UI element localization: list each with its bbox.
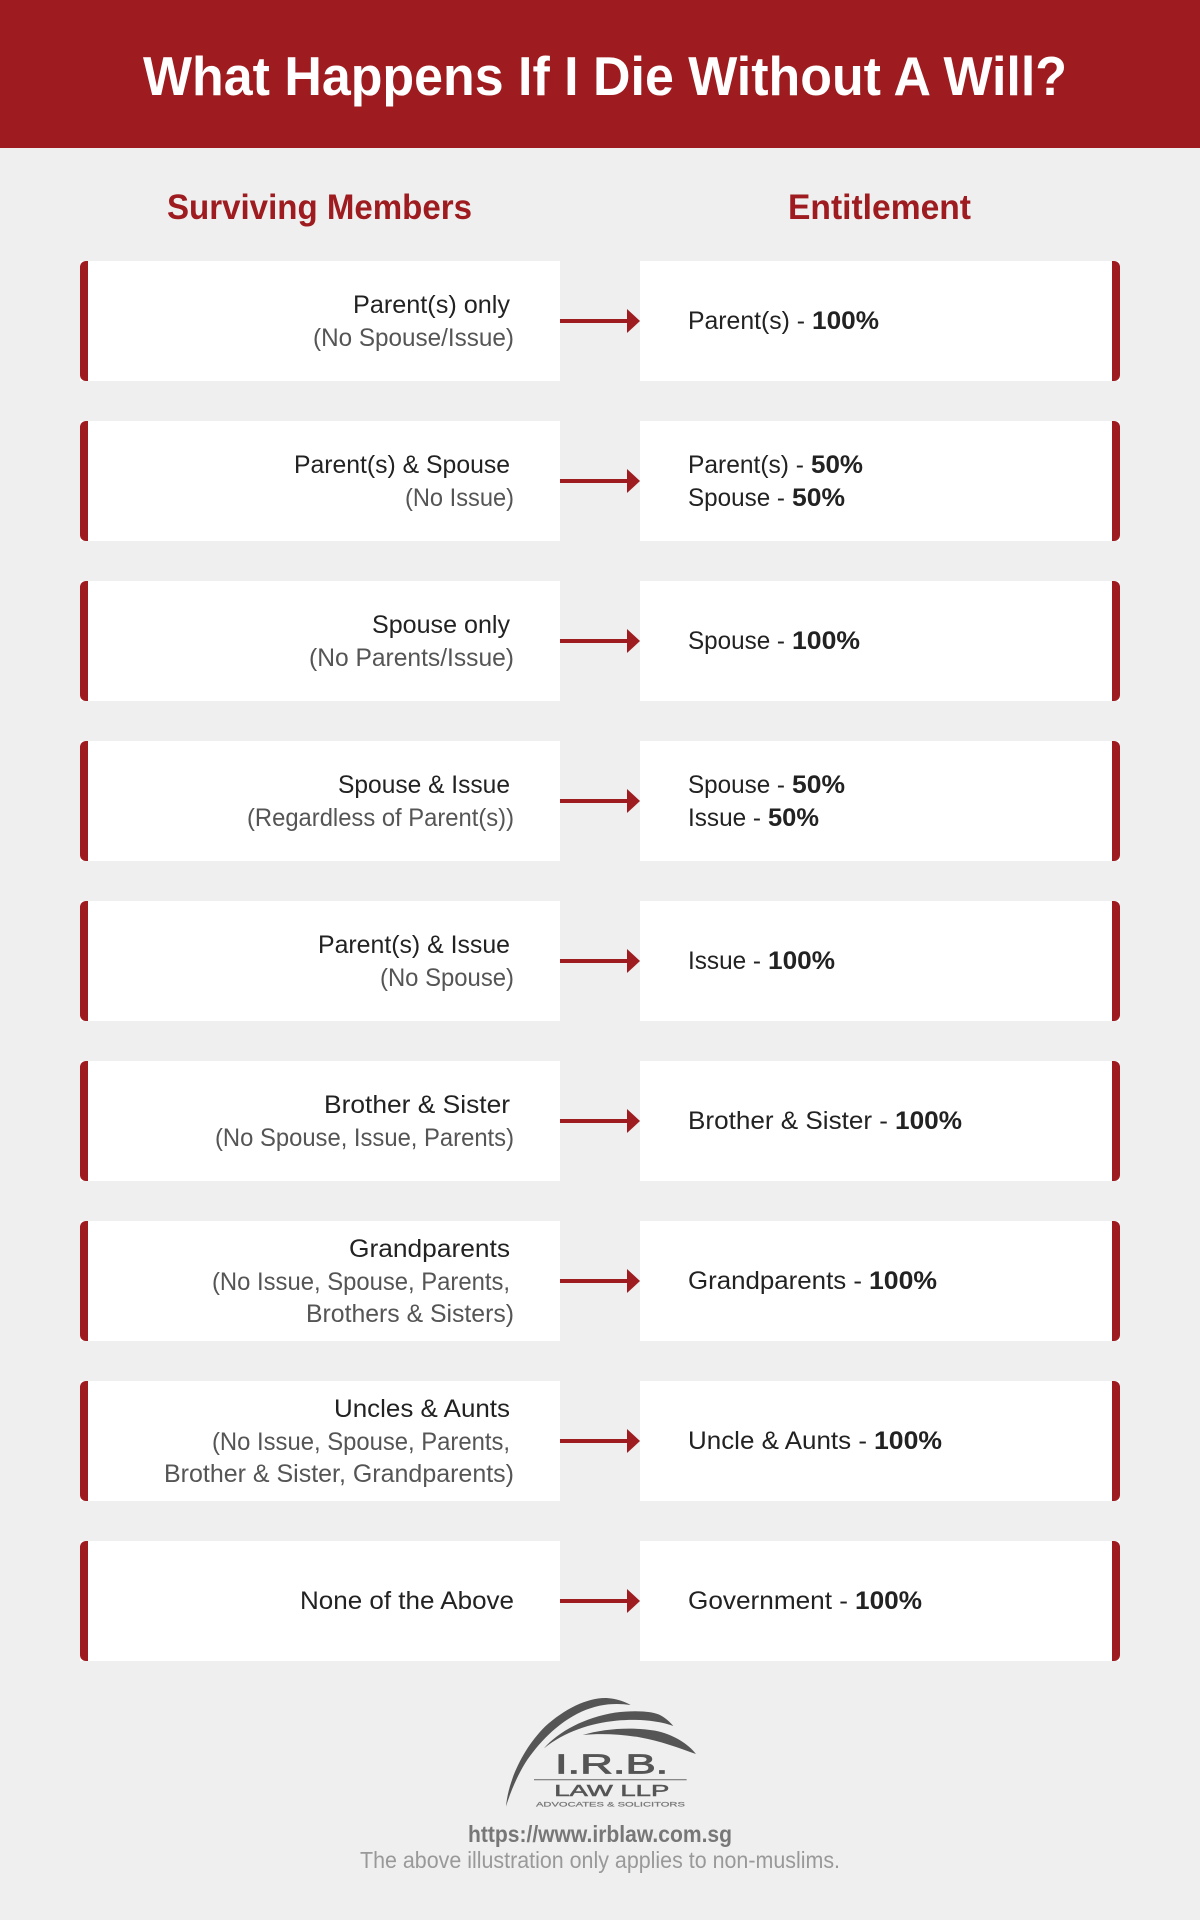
row 7: grandparents: Brothers & Sisters) bbox=[306, 1300, 514, 1328]
row 5: parents and issue: (No Spouse) bbox=[380, 964, 514, 992]
row 5: parents and issue: Issue - bbox=[688, 947, 761, 975]
row 4: spouse and issue: Spouse - bbox=[688, 771, 785, 799]
row 4: spouse and issue: 50% bbox=[792, 771, 845, 799]
row 2: parents and spouse: Parent(s) - bbox=[688, 451, 804, 479]
heading: entitlement: Entitlement bbox=[788, 188, 971, 227]
footer url: https://www.irblaw.com.sg bbox=[468, 1821, 732, 1847]
footer disclaimer: The above illustration only applies to non-muslims. bbox=[360, 1847, 840, 1873]
row 4: spouse and issue: 50% bbox=[768, 804, 819, 832]
row 5: parents and issue bbox=[80, 901, 1120, 1021]
row 6: brother and sister: Brother & Sister - bbox=[688, 1107, 888, 1135]
row 6: brother and sister: Brother & Sister bbox=[324, 1091, 510, 1119]
row 9: none of the above: None of the Above bbox=[300, 1587, 514, 1615]
row 4: spouse and issue: Issue - bbox=[688, 804, 761, 832]
row 1: parents only bbox=[80, 261, 1120, 381]
row 6: brother and sister: 100% bbox=[895, 1107, 962, 1135]
row 4: spouse and issue bbox=[80, 741, 1120, 861]
row 2: parents and spouse: Spouse - bbox=[688, 484, 785, 512]
row 4: spouse and issue: (Regardless of Parent(s)) bbox=[247, 804, 514, 832]
logo: I.R.B. Law LLP: LAW LLP bbox=[554, 1783, 669, 1800]
row 6: brother and sister bbox=[80, 1061, 1120, 1181]
row 8: uncles and aunts: Uncles & Aunts bbox=[334, 1395, 510, 1423]
heading: surviving members: Surviving Members bbox=[167, 188, 472, 227]
header banner: What Happens If I Die Without A Will? bbox=[143, 45, 1067, 107]
row 8: uncles and aunts: (No Issue, Spouse, Parents, bbox=[212, 1428, 510, 1456]
row 9: none of the above bbox=[80, 1541, 1120, 1661]
row 6: brother and sister: (No Spouse, Issue, Parents) bbox=[215, 1124, 514, 1152]
row 2: parents and spouse: 50% bbox=[792, 484, 845, 512]
row 8: uncles and aunts: Brother & Sister, Grandparents) bbox=[164, 1460, 514, 1488]
row 7: grandparents: Grandparents - bbox=[688, 1267, 862, 1295]
row 7: grandparents: Grandparents bbox=[349, 1235, 510, 1263]
row 1: parents only: Parent(s) only bbox=[353, 291, 510, 319]
row 7: grandparents bbox=[80, 1221, 1120, 1341]
row 9: none of the above: 100% bbox=[855, 1587, 922, 1615]
logo: I.R.B. Law LLP: I.R.B. bbox=[555, 1748, 668, 1779]
row 3: spouse only bbox=[80, 581, 1120, 701]
row 3: spouse only: (No Parents/Issue) bbox=[309, 644, 514, 672]
row 2: parents and spouse: (No Issue) bbox=[405, 484, 514, 512]
row 8: uncles and aunts bbox=[80, 1381, 1120, 1501]
row 3: spouse only: Spouse only bbox=[372, 611, 510, 639]
row 8: uncles and aunts: 100% bbox=[874, 1427, 942, 1455]
row 5: parents and issue: Parent(s) & Issue bbox=[318, 931, 510, 959]
row 2: parents and spouse bbox=[80, 421, 1120, 541]
row 1: parents only: Parent(s) - bbox=[688, 307, 805, 335]
row 4: spouse and issue: Spouse & Issue bbox=[338, 771, 510, 799]
row 1: parents only: 100% bbox=[812, 307, 879, 335]
row 5: parents and issue: 100% bbox=[768, 947, 835, 975]
row 2: parents and spouse: 50% bbox=[811, 451, 863, 479]
row 8: uncles and aunts: Uncle & Aunts - bbox=[688, 1427, 867, 1455]
row 2: parents and spouse: Parent(s) & Spouse bbox=[294, 451, 510, 479]
row 3: spouse only: Spouse - bbox=[688, 627, 785, 655]
row 9: none of the above: Government - bbox=[688, 1587, 848, 1615]
row 7: grandparents: 100% bbox=[869, 1267, 937, 1295]
row 1: parents only: (No Spouse/Issue) bbox=[313, 324, 514, 352]
logo: I.R.B. Law LLP: ADVOCATES & SOLICITORS bbox=[536, 1802, 686, 1809]
row 7: grandparents: (No Issue, Spouse, Parents, bbox=[212, 1268, 510, 1296]
logo: I.R.B. Law LLP bbox=[506, 1698, 696, 1809]
header banner bbox=[0, 0, 1200, 148]
row 3: spouse only: 100% bbox=[792, 627, 860, 655]
